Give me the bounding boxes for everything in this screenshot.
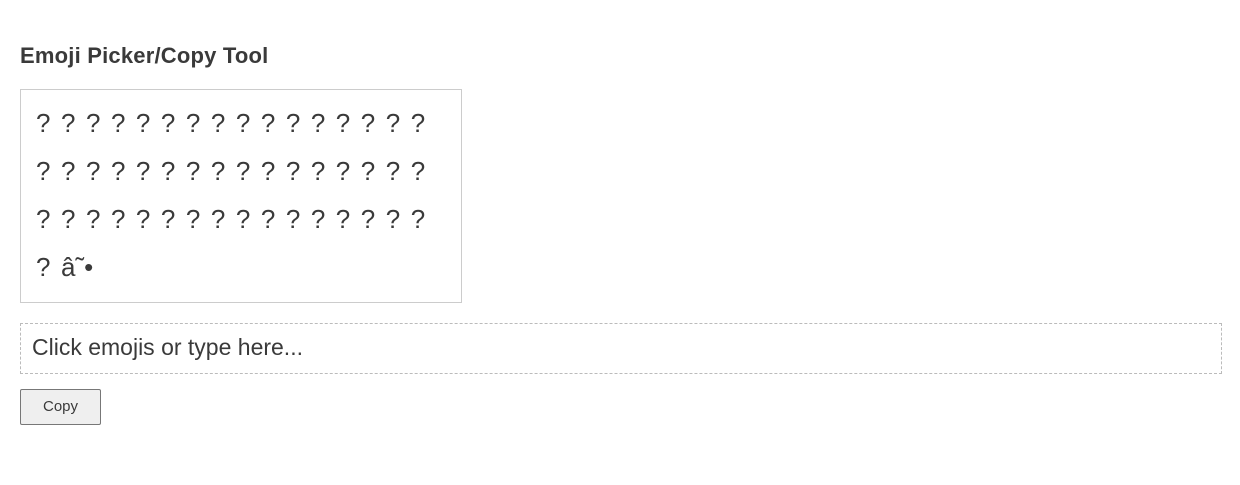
- emoji row 1: ? ? ? ? ? ? ? ? ? ? ? ? ? ? ? ?: [36, 108, 425, 138]
- text input: [20, 323, 1222, 374]
- copy button: [20, 389, 101, 425]
- text input: Click emojis or type here...: [32, 334, 303, 360]
- emoji row 3: ? ? ? ? ? ? ? ? ? ? ? ? ? ? ? ?: [36, 204, 425, 234]
- title: Emoji Picker/Copy Tool: [20, 43, 268, 68]
- panel: emoji grid: [20, 89, 462, 303]
- emoji row 2: ? ? ? ? ? ? ? ? ? ? ? ? ? ? ? ?: [36, 156, 425, 186]
- copy button: Copy: [43, 398, 78, 415]
- emoji row 4: ? â˜•: [36, 252, 93, 282]
